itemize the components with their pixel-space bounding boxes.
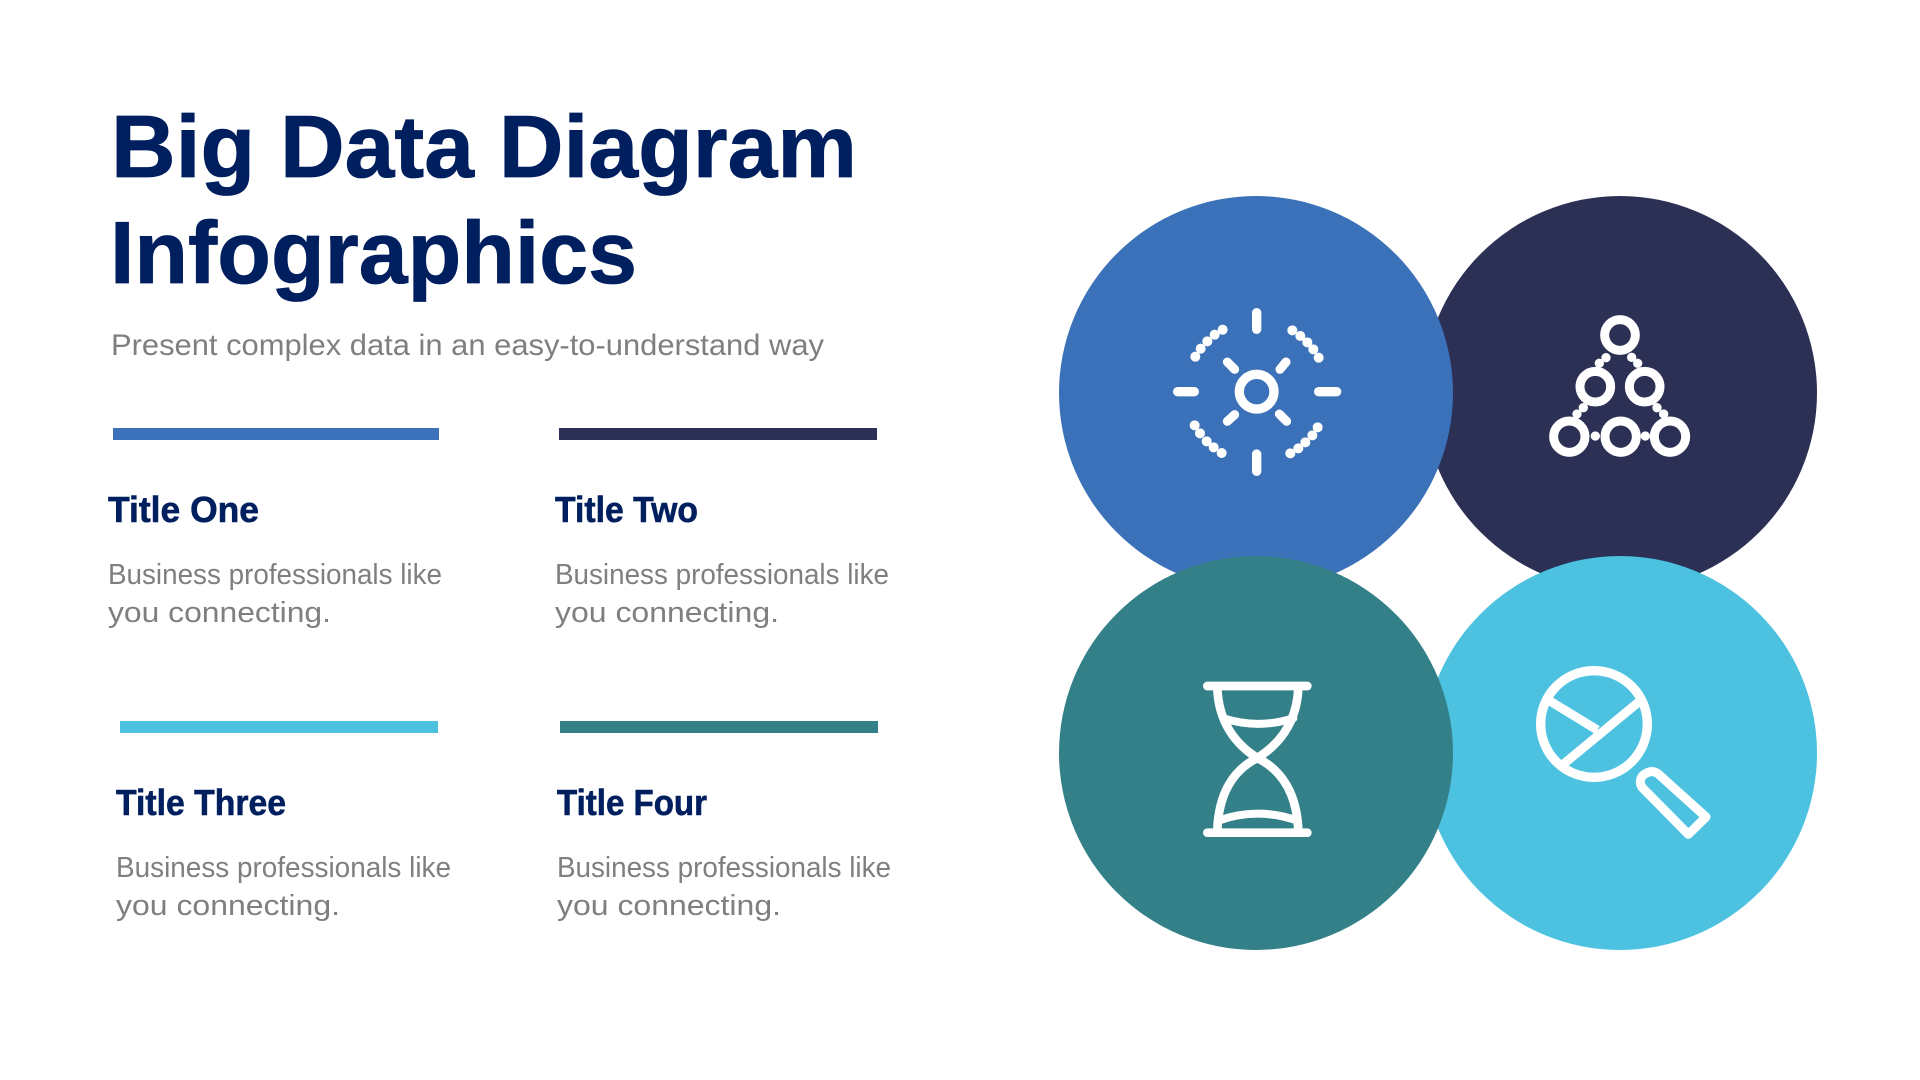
- body four: Business professionals like: [557, 852, 891, 884]
- accent bar three: [120, 721, 438, 733]
- icon: hourglass: [1207, 686, 1307, 833]
- circle: teal: [1059, 556, 1453, 950]
- icon: node triangle: [1554, 320, 1686, 452]
- circle: sky: [1423, 556, 1817, 950]
- body three: [116, 852, 451, 922]
- panel: title two: [555, 428, 889, 629]
- icon: radiating target: [1178, 313, 1337, 471]
- body three: you connecting.: [116, 890, 340, 922]
- panel: title three: [116, 721, 451, 922]
- title: Infographics: [110, 203, 637, 302]
- accent bar two: [559, 428, 877, 440]
- body three: Business professionals like: [116, 852, 451, 884]
- accent bar one: [113, 428, 439, 440]
- heading three: Title Three: [116, 782, 286, 823]
- body one: Business professionals like: [108, 559, 442, 591]
- circle: blue: [1059, 196, 1453, 590]
- body one: [108, 559, 442, 629]
- body two: you connecting.: [555, 597, 779, 629]
- panel: title four: [557, 721, 891, 922]
- heading two: Title Two: [555, 489, 698, 530]
- subtitle: Present complex data in an easy-to-understand way: [111, 329, 824, 362]
- body one: you connecting.: [108, 597, 331, 629]
- body four: [557, 852, 891, 922]
- accent bar four: [560, 721, 878, 733]
- body two: [555, 559, 889, 629]
- panel: title one: [108, 428, 442, 629]
- title: Big Data Diagram: [111, 97, 857, 196]
- circle: navy: [1423, 196, 1817, 590]
- body two: Business professionals like: [555, 559, 889, 591]
- title: [110, 97, 857, 302]
- heading four: Title Four: [557, 782, 707, 823]
- body four: you connecting.: [557, 890, 781, 922]
- icon: magnifier with pie chart: [1541, 671, 1706, 834]
- heading one: Title One: [108, 489, 259, 530]
